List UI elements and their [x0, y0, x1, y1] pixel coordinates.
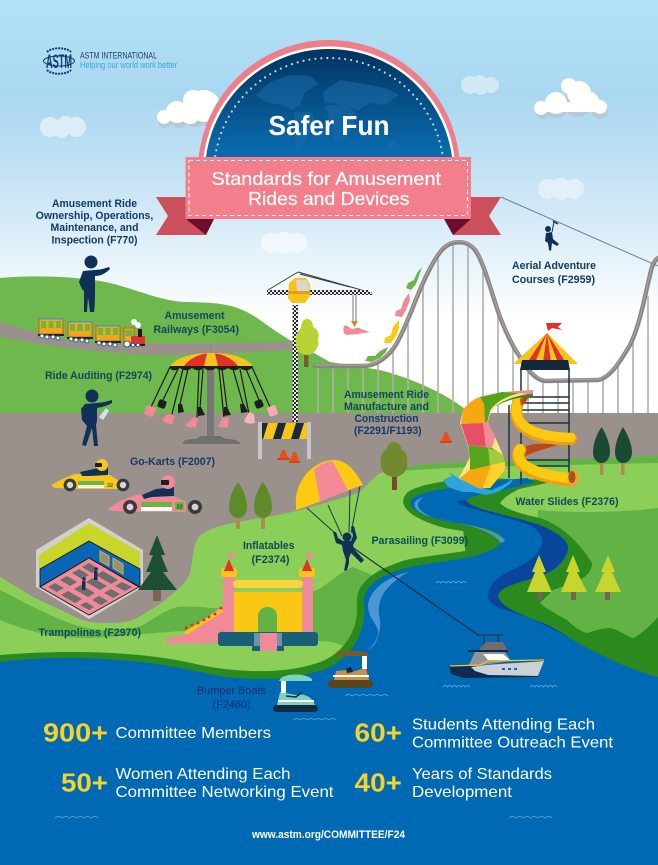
- label: aerial adventure: [512, 260, 596, 286]
- towers: [223, 577, 235, 633]
- label: aerial adventure: Courses (F2959): [512, 274, 595, 286]
- tower flags: [229, 553, 237, 560]
- label: bumper boats: (F2460): [212, 699, 250, 711]
- stat: 40+ years: Development: [412, 784, 513, 801]
- river water: [0, 478, 658, 865]
- cloud: large right: [534, 78, 608, 119]
- train carriage 1: [38, 318, 64, 340]
- cloud: faded left: [40, 116, 86, 138]
- ribbon fold right: [444, 219, 471, 235]
- water ripples: [55, 582, 557, 818]
- label: railways: [154, 310, 239, 336]
- sky background: [0, 0, 658, 420]
- label: ride ownership: [36, 198, 153, 246]
- lime pine trees: [527, 555, 621, 600]
- label: manufacture: Construction: [354, 413, 418, 425]
- tower top: [520, 360, 570, 370]
- label: manufacture: Amusement Ride: [344, 389, 429, 401]
- slide mouth: [568, 470, 578, 486]
- ribbon tail left: [156, 197, 206, 235]
- stat: 900+ committee members: 900+: [43, 720, 108, 748]
- label: trampolines: Trampolines (F2970): [38, 627, 141, 639]
- label: ride ownership: Maintenance, and: [50, 222, 138, 234]
- ribbon tail right: [453, 197, 501, 235]
- crane: [267, 272, 374, 422]
- cloud: faded upper right: [461, 75, 499, 95]
- wheels: [65, 480, 128, 490]
- tree by crane: [296, 319, 319, 367]
- stat: 40+ years: [354, 766, 552, 801]
- label: inflatables: [243, 540, 295, 566]
- logo name: ASTM INTERNATIONAL: [80, 50, 157, 60]
- label: ride ownership: Amusement Ride: [52, 198, 137, 210]
- river bank right: [460, 480, 658, 690]
- railway path: [0, 322, 296, 355]
- river highlight upper: [414, 497, 505, 543]
- slide top pink: [503, 390, 533, 394]
- bounce house: [166, 553, 318, 651]
- coaster cars: [365, 267, 422, 362]
- stat: 50+ women: 50+: [61, 770, 108, 798]
- slide top green: [480, 392, 520, 423]
- boat hull: [449, 660, 544, 678]
- zip line: [501, 197, 658, 266]
- stat: 60+ students: Students Attending Each: [412, 716, 595, 734]
- land lower light green: [0, 456, 658, 865]
- swing chains: [151, 367, 270, 418]
- mini train: [38, 318, 145, 347]
- door: [258, 607, 277, 632]
- go-kart pink: [109, 475, 200, 512]
- label: railways: Amusement: [164, 310, 225, 322]
- multicolour water slide: [459, 390, 533, 489]
- speed boat: [449, 635, 544, 678]
- jumpers: [82, 567, 98, 590]
- swing pole: [207, 369, 214, 437]
- cloud: faded under banner: [261, 232, 307, 254]
- tower caps: [221, 568, 237, 577]
- train carriage 3: [95, 325, 121, 347]
- green hill upper left: [0, 276, 470, 413]
- slide ramp: [166, 606, 226, 644]
- slide yellow base: [483, 462, 505, 488]
- slide dots: [184, 606, 222, 630]
- pine tree by trampolines: [138, 535, 177, 601]
- stat: 40+ years: Years of Standards: [412, 766, 552, 783]
- gray park ground: [0, 413, 658, 643]
- barricade stripes: [262, 423, 307, 439]
- train carriage 2: [67, 321, 93, 343]
- label: water slides: Water Slides (F2376): [516, 496, 618, 508]
- dotted ring: [214, 56, 444, 157]
- swing seats pink: [144, 405, 278, 428]
- bumper boat brown: [328, 651, 373, 688]
- river dark shade: [458, 500, 578, 643]
- stat: 50+ women: [61, 766, 334, 801]
- river highlight lower: [368, 572, 408, 650]
- crane load: [343, 325, 370, 335]
- slide pink band: [483, 422, 495, 448]
- tent flag: [546, 323, 562, 331]
- label: railways: Railways (F3054): [154, 324, 239, 336]
- stat: 60+ students: Committee Outreach Event: [412, 734, 614, 752]
- slide inner strip: [495, 393, 533, 407]
- driver: [142, 487, 174, 499]
- trampoline mats: [48, 563, 132, 610]
- tent canopy: [513, 333, 578, 364]
- water slide tower: [509, 323, 578, 484]
- land top strip right: [392, 456, 658, 472]
- barricade: [258, 422, 311, 459]
- main wall: [234, 591, 302, 632]
- world map: [256, 75, 399, 153]
- logo tagline: Helping our world work better: [80, 60, 177, 70]
- label: manufacture: Manufacture and: [344, 401, 429, 413]
- kart number: 23: [176, 504, 183, 510]
- tow line: [352, 547, 478, 635]
- stat: 900+ committee members: [43, 720, 271, 748]
- base: [218, 632, 318, 646]
- tower cones: [224, 559, 234, 571]
- stat: 60+ students: 60+: [354, 720, 402, 748]
- banner: [186, 157, 471, 219]
- logo mark: ASTM: [46, 52, 72, 73]
- dome badge: [198, 40, 460, 157]
- swing ride: [144, 345, 278, 444]
- swing base: [183, 436, 240, 444]
- boat arch: [478, 635, 503, 648]
- kart number: 32: [107, 483, 113, 489]
- wall panels: [100, 551, 123, 574]
- trampoline park: [36, 518, 143, 619]
- go-kart yellow: [52, 459, 128, 490]
- slide light green band: [488, 448, 505, 466]
- auditor tablet: [99, 408, 109, 420]
- top beam: [233, 580, 303, 588]
- crane tower: [292, 305, 298, 422]
- person: zip liner: [545, 221, 559, 251]
- barricade posts: [258, 422, 262, 459]
- dome outer ring: [198, 40, 460, 157]
- trampoline floor: [40, 558, 139, 615]
- swing canopy: [170, 353, 253, 366]
- olive trees: [229, 482, 272, 529]
- label: inflatables: Inflatables: [243, 540, 295, 552]
- label: ride ownership: Ownership, Operations,: [36, 210, 153, 222]
- parachute canopy: [296, 460, 363, 510]
- trampoline lime wall: [39, 523, 140, 569]
- banner: Rides and Devices: [248, 188, 410, 209]
- crane cables: [268, 272, 372, 293]
- bumper boat teal: [273, 674, 318, 712]
- cloud: faded banner right: [538, 178, 584, 200]
- stat: 40+ years: 40+: [354, 770, 402, 798]
- ribbon fold left: [186, 219, 214, 235]
- slide lip: [459, 390, 533, 489]
- boat cabin top: [480, 642, 508, 651]
- person: ride auditor: [81, 390, 112, 446]
- stat: 900+ committee members: Committee Members: [116, 725, 271, 742]
- slide red band: [461, 423, 486, 447]
- stat: 50+ women: Committee Networking Event: [116, 784, 334, 801]
- cloud: large left of dome: [157, 90, 222, 128]
- trampoline blue wall: [40, 541, 140, 587]
- train smoke: [131, 319, 141, 328]
- label: inflatables: (F2374): [252, 554, 290, 566]
- label: ride auditing: Ride Auditing (F2974): [45, 370, 152, 382]
- logo: ASTM International: [44, 48, 177, 74]
- wheels: [125, 502, 200, 512]
- tower frame: [509, 369, 569, 484]
- label: go-karts: Go-Karts (F2007): [130, 456, 215, 468]
- parachute lines: [307, 486, 360, 536]
- label: aerial adventure: Aerial Adventure: [512, 260, 596, 272]
- slide green band: [468, 445, 505, 470]
- slide top orange: [461, 397, 485, 424]
- driver: [80, 467, 108, 476]
- river bank left: [0, 478, 560, 700]
- label: manufacture: (F2291/F1193): [354, 425, 422, 437]
- land left mid green: [0, 567, 372, 655]
- stat: 60+ students: [354, 716, 614, 752]
- swing canopy scallops: [170, 366, 253, 370]
- steps: [260, 633, 277, 651]
- title: Safer Fun: [268, 110, 390, 141]
- swing spike: [210, 345, 212, 354]
- round tree near river: [381, 442, 407, 490]
- label: parasailing: Parasailing (F3099): [372, 535, 468, 547]
- trampoline frame: [36, 518, 143, 619]
- yellow spiral slide: [516, 396, 578, 486]
- parasailor figure: [333, 526, 364, 571]
- stat: 50+ women: Women Attending Each: [116, 766, 290, 783]
- land right mid green: [530, 508, 658, 640]
- website url: www.astm.org/COMMITTEE/F24: [251, 829, 406, 841]
- label: bumper boats: Bumper Boats: [197, 685, 266, 697]
- crane cab: [288, 278, 310, 303]
- person: ride owner: [79, 256, 110, 312]
- train engine: [124, 319, 145, 347]
- parasailor: [296, 460, 364, 571]
- crane boom: [267, 290, 374, 295]
- label: bumper boats: [197, 685, 266, 711]
- water splash: [443, 472, 514, 495]
- roller coaster track: [315, 241, 658, 381]
- slide orange base: [460, 462, 505, 488]
- boat cabin: [468, 652, 511, 667]
- swing seats black: [157, 399, 264, 416]
- subtitle: Standards for Amusement: [212, 168, 441, 189]
- dark trees right: [593, 427, 632, 475]
- traffic cones: [277, 432, 452, 463]
- label: ride ownership: Inspection (F770): [52, 234, 138, 246]
- coaster supports: [318, 244, 648, 413]
- label: manufacture: [344, 389, 429, 437]
- crane hook cable: [353, 295, 356, 322]
